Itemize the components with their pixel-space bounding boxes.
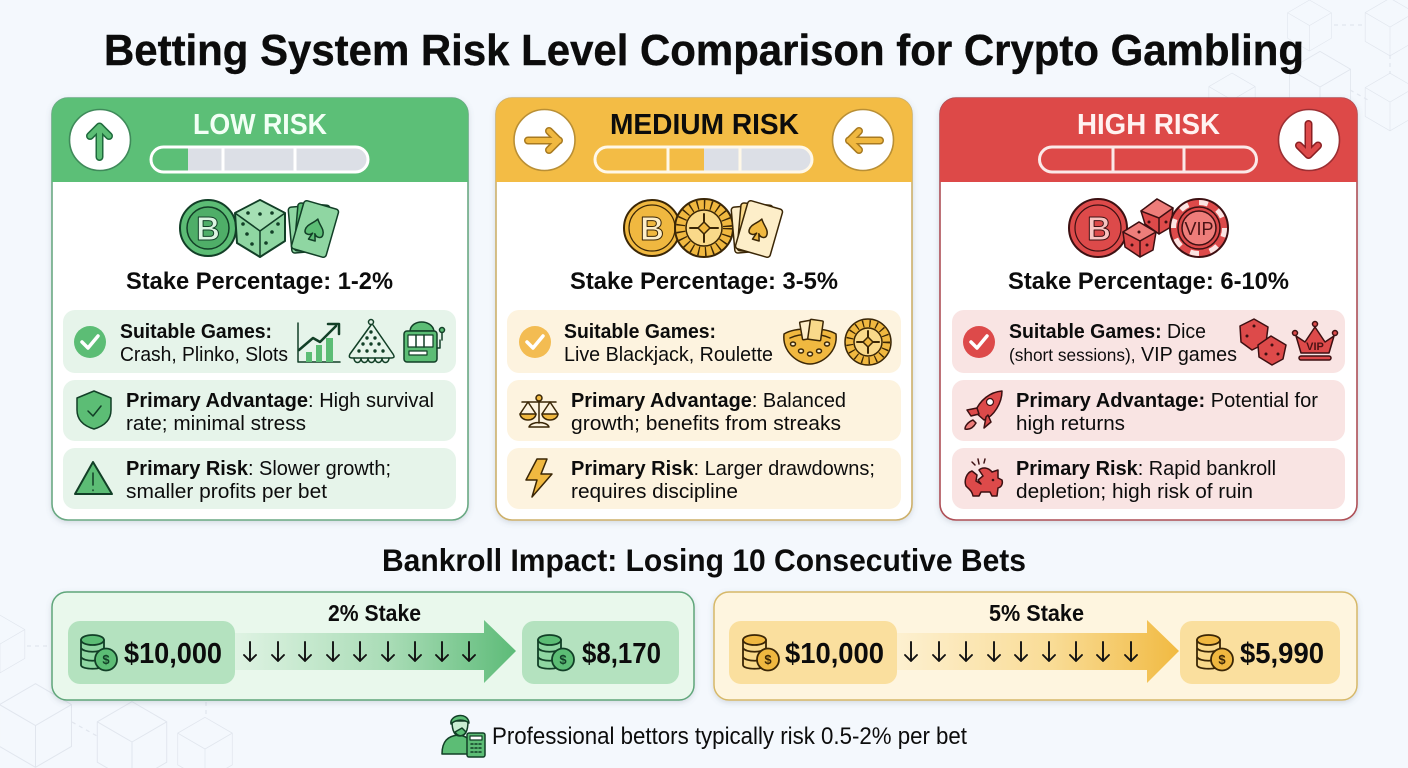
loss arrows	[244, 642, 475, 661]
panel: medium risk	[496, 98, 912, 520]
icon: down arrow badge	[1278, 110, 1340, 170]
icon: vip crown: VIP	[1306, 341, 1324, 353]
loss arrows	[905, 642, 1137, 661]
text	[564, 321, 773, 366]
row: primary advantage	[952, 380, 1345, 441]
icons: coin, dice, vip chip	[1069, 199, 1228, 257]
icon: blackjack table	[784, 319, 836, 364]
amount: $10,000	[785, 638, 884, 670]
stake label: 2% Stake	[328, 600, 421, 626]
icon: roulette	[845, 319, 891, 365]
arrow	[235, 620, 516, 683]
row: primary advantage	[507, 380, 901, 441]
icon: coins: $	[764, 652, 772, 667]
text: Suitable Games:	[564, 321, 716, 343]
row: primary risk	[507, 448, 901, 509]
icon: lightning bolt	[526, 459, 552, 497]
stake percentage: Stake Percentage: 1-2%	[126, 268, 393, 295]
heading: medium risk: MEDIUM RISK	[610, 109, 799, 141]
title: Betting System Risk Level Comparison for Crypto Gambling	[104, 26, 1304, 75]
icon: check	[519, 326, 551, 358]
text	[571, 458, 875, 503]
icon: dice	[1240, 319, 1286, 365]
icon: coins: $	[102, 652, 110, 667]
icon: coins	[1197, 635, 1233, 670]
text: Primary Advantage: High survival	[126, 390, 434, 412]
text: Primary Risk: Larger drawdowns;	[571, 458, 875, 480]
text: Primary Risk: Slower growth;	[126, 458, 391, 480]
icon: rocket	[965, 391, 1002, 429]
risk meter	[151, 147, 368, 172]
row: suitable games	[952, 310, 1345, 373]
text: rate; minimal stress	[126, 413, 306, 435]
panel: 2% stake	[52, 592, 694, 700]
amount: $5,990	[1240, 638, 1324, 670]
arrow	[897, 620, 1179, 683]
icon: coins	[538, 635, 574, 670]
icon: shield	[77, 391, 111, 429]
end chip	[1180, 621, 1340, 684]
heading: low risk: LOW RISK	[193, 109, 327, 141]
icons: coin, dice, vip chip: B	[1087, 210, 1111, 247]
stake label: 5% Stake	[989, 600, 1084, 626]
amount: $10,000	[124, 638, 222, 670]
icons: coin, dice, vip chip: VIP	[1184, 219, 1214, 239]
row: primary risk	[63, 448, 456, 509]
text	[571, 390, 846, 435]
icon: coins	[81, 635, 117, 670]
panel: high risk	[940, 98, 1357, 520]
icon: scales	[520, 395, 558, 427]
text	[120, 321, 288, 366]
icon: slot machine	[404, 322, 444, 362]
icon: crash chart	[298, 323, 340, 362]
start chip	[68, 621, 235, 684]
text: Suitable Games:	[120, 321, 272, 343]
text: Primary Risk: Rapid bankroll	[1016, 458, 1276, 480]
icons: coin, roulette, cards: B	[640, 210, 664, 247]
text	[1009, 321, 1237, 366]
heading: bankroll impact: Bankroll Impact: Losing 10 Consecutive Bets	[382, 542, 1026, 578]
stake percentage: Stake Percentage: 3-5%	[570, 268, 838, 295]
icon: professional bettor with calculator	[442, 716, 485, 757]
icon: plinko	[349, 320, 394, 362]
footer note: Professional bettors typically risk 0.5-2% per bet	[492, 723, 967, 750]
stake percentage: Stake Percentage: 6-10%	[1008, 268, 1289, 295]
icon: check	[74, 326, 106, 358]
row: suitable games	[63, 310, 456, 373]
text: growth; benefits from streaks	[571, 413, 841, 435]
text: Live Blackjack, Roulette	[564, 344, 773, 366]
panel: low risk	[52, 98, 468, 520]
icon: coins: $	[1218, 652, 1226, 667]
end chip	[522, 621, 679, 684]
text	[126, 458, 391, 503]
risk meter	[1040, 147, 1256, 172]
icon: check	[963, 326, 995, 358]
text	[1016, 458, 1276, 503]
text: Primary Advantage: Potential for	[1016, 390, 1318, 412]
row: suitable games	[507, 310, 901, 373]
icons: coin, die, cards: B	[196, 210, 220, 247]
panel: 5% stake	[714, 592, 1357, 700]
icon: up arrow badge	[70, 110, 130, 170]
icon: left arrow badge	[832, 110, 894, 170]
amount: $8,170	[582, 638, 661, 670]
row: primary risk	[952, 448, 1345, 509]
start chip	[729, 621, 897, 684]
text: requires discipline	[571, 481, 738, 503]
text	[126, 390, 434, 435]
text: Suitable Games: Dice	[1009, 321, 1206, 343]
row: primary advantage	[63, 380, 456, 441]
text: Primary Advantage: Balanced	[571, 390, 846, 412]
icons: coin, roulette, cards	[624, 199, 783, 258]
text	[1016, 390, 1318, 435]
heading: high risk: HIGH RISK	[1077, 109, 1220, 141]
icon: vip crown	[1292, 322, 1338, 360]
icons: coin, die, cards	[180, 200, 339, 258]
text: smaller profits per bet	[126, 481, 327, 503]
icon: warning triangle	[75, 462, 112, 494]
icon: right arrow badge	[514, 110, 575, 170]
risk meter	[595, 147, 812, 172]
icon: broken piggy bank	[965, 459, 1002, 496]
text: depletion; high risk of ruin	[1016, 481, 1253, 503]
text: Crash, Plinko, Slots	[120, 344, 288, 366]
text: high returns	[1016, 413, 1125, 435]
text: (short sessions), VIP games	[1009, 344, 1237, 366]
icon: coins: $	[559, 652, 567, 667]
icon: coins	[743, 635, 779, 670]
